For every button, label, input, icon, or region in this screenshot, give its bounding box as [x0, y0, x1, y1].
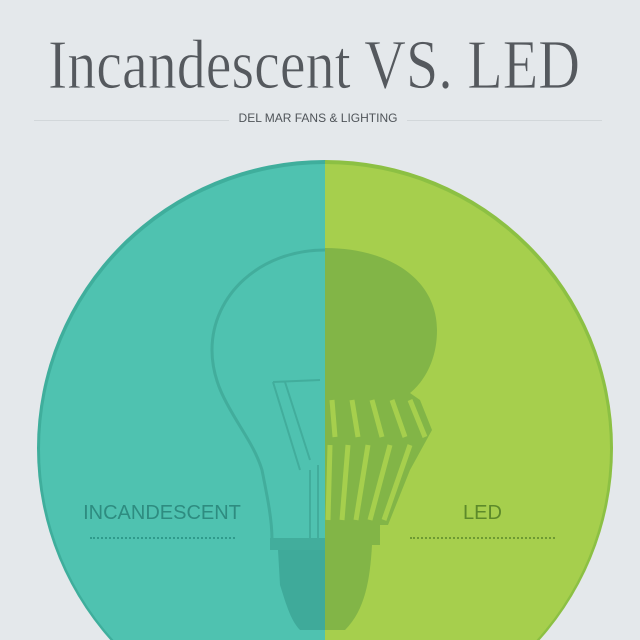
- label: led: LED: [463, 502, 502, 524]
- icon: led bulb: [320, 248, 437, 630]
- subtitle: DEL MAR FANS & LIGHTING: [239, 111, 397, 125]
- half: incandescent: [37, 160, 325, 640]
- half: led: [325, 160, 613, 640]
- comparison circle: [37, 160, 613, 640]
- label: incandescent: INCANDESCENT: [83, 502, 241, 524]
- icon: incandescent bulb: [212, 250, 330, 630]
